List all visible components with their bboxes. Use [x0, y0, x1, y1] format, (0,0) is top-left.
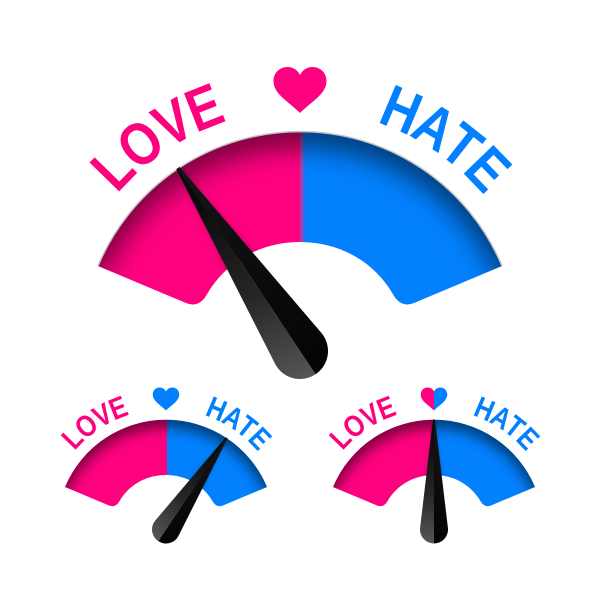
heart icon: large pink: [274, 67, 326, 113]
label: LOVE: V: [142, 85, 204, 160]
gauge: large love-hate meter: [78, 67, 524, 390]
label: HATE: [202, 390, 278, 456]
label: HATE: H: [372, 72, 431, 148]
dial: pink and blue arc: [65, 420, 267, 506]
label: HATE: A: [402, 89, 468, 165]
dial: pink and blue arc: [333, 420, 535, 506]
label: LOVE: V: [87, 396, 118, 434]
label: HATE: [470, 390, 546, 456]
heart icon: blue: [153, 388, 179, 410]
gauge: small meter pointing to centre: [323, 388, 546, 544]
label: HATE: H: [470, 390, 500, 428]
needle pointing to love: [155, 152, 339, 390]
label: LOVE: L: [55, 421, 90, 455]
label: HATE: E: [242, 421, 278, 456]
label: LOVE: L: [323, 421, 358, 455]
heart icon: half pink half blue: [421, 388, 447, 410]
needle pointing to centre: [420, 420, 448, 544]
label: HATE: T: [499, 409, 532, 445]
label: HATE: E: [452, 134, 524, 204]
label: LOVE: E: [104, 389, 132, 427]
label: LOVE: O: [68, 407, 104, 445]
label: LOVE: L: [78, 134, 148, 203]
dial rim: [98, 132, 502, 266]
label: HATE: A: [485, 398, 518, 436]
needle pointing to hate: [147, 430, 238, 549]
dial: pink and blue arc: [98, 132, 502, 304]
gauge: small meter pointing to hate: [55, 388, 278, 549]
label: LOVE: V: [355, 396, 386, 434]
label: HATE: T: [429, 110, 495, 182]
label: LOVE: [55, 389, 132, 455]
label: LOVE: O: [104, 105, 176, 182]
label: HATE: A: [217, 398, 250, 436]
label: LOVE: O: [336, 407, 372, 445]
label: HATE: H: [202, 390, 232, 428]
label: HATE: [372, 72, 524, 204]
label: LOVE: [78, 70, 232, 203]
label: LOVE: [323, 389, 400, 455]
label: LOVE: E: [372, 389, 400, 427]
label: HATE: T: [231, 409, 264, 445]
label: LOVE: E: [176, 70, 232, 145]
label: HATE: E: [510, 421, 546, 456]
